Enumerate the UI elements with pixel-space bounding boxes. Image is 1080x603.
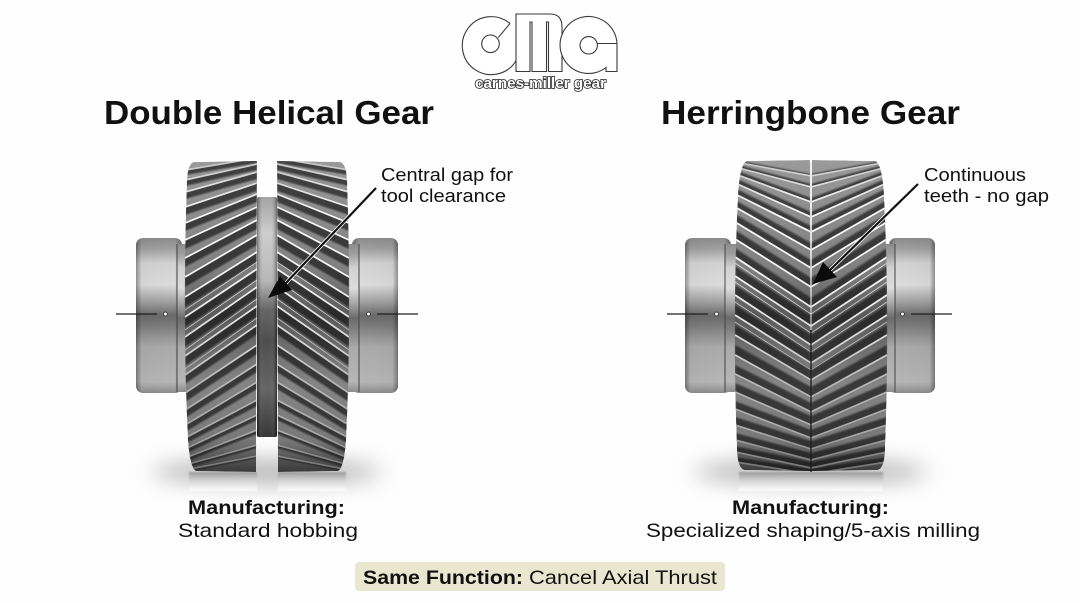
manufacturing text: hobbing — [178, 497, 358, 542]
left helical teeth — [185, 158, 257, 472]
left axis marker — [667, 312, 718, 316]
callout: continuous teeth: teeth - no gap — [924, 185, 1049, 206]
manufacturing text: hobbing: Manufacturing: — [188, 497, 345, 519]
floor reflection — [189, 472, 346, 491]
callout: same function: Cancel Axial Thrust — [529, 567, 718, 589]
right hub — [884, 238, 935, 393]
left axis marker — [116, 312, 167, 316]
callout: central gap — [381, 164, 513, 206]
logo: carnes-miller gear — [462, 14, 617, 92]
floor shadow — [694, 460, 928, 484]
title: herringbone gear: Herringbone Gear — [661, 94, 960, 131]
logo letter m — [516, 14, 562, 72]
logo letter c — [462, 17, 516, 75]
right half of chevron teeth — [811, 160, 887, 474]
left half of chevron teeth — [735, 160, 811, 474]
callout: continuous teeth — [924, 164, 1049, 206]
chevron centre line — [810, 162, 812, 330]
logo wordmark: carnes-miller gear — [475, 75, 606, 92]
callout: same function: Same Function: — [363, 567, 523, 589]
left hub — [685, 238, 737, 393]
manufacturing text: shaping and milling: Specialized shaping/5-axis milling — [646, 520, 980, 542]
right axis marker — [901, 312, 952, 316]
callout: same function — [355, 562, 725, 591]
right hub — [347, 238, 398, 393]
manufacturing text: hobbing: Standard hobbing — [178, 520, 358, 542]
title: double helical gear: Double Helical Gear — [104, 94, 434, 131]
chevron lower seam — [810, 330, 812, 472]
floor shadow — [152, 460, 382, 484]
left hub — [136, 238, 187, 393]
manufacturing text: shaping and milling: Manufacturing: — [732, 497, 889, 519]
logo letter g — [560, 16, 617, 73]
central spindle gap — [257, 197, 277, 437]
callout: central gap: tool clearance — [381, 185, 506, 206]
panel: herringbone gear — [646, 94, 1049, 542]
arrow: continuous teeth — [813, 184, 918, 284]
right helical teeth — [277, 158, 349, 472]
arrow: central gap — [268, 188, 376, 298]
panel: double helical gear — [104, 94, 513, 542]
manufacturing text: shaping and milling — [646, 497, 980, 542]
floor reflection — [739, 472, 883, 491]
callout: central gap: Central gap for — [381, 164, 513, 185]
right axis marker — [367, 312, 418, 316]
callout: continuous teeth: Continuous — [924, 164, 1026, 185]
